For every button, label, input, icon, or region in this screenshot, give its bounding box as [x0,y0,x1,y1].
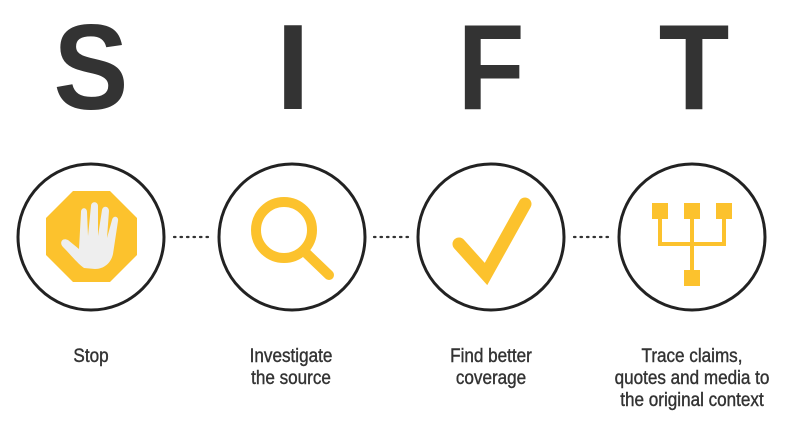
icon: magnifier [256,202,329,275]
label: trace: quotes and media to [615,367,769,388]
icon: tree [652,203,732,286]
label: trace: Trace claims, [642,345,742,366]
label: stop: Stop [73,345,109,366]
title: SIFT: S [54,0,128,135]
icon: check mark [459,204,525,274]
title: SIFT: F [457,0,525,135]
title: SIFT: T [659,0,729,136]
panel: investigate [219,164,365,310]
label: trace: the original context [620,389,764,410]
panel: trace [619,164,765,310]
title: SIFT: I [276,0,310,135]
label: find: coverage [456,367,526,388]
title: SIFT [54,0,729,136]
label: investigate: Investigate [250,345,332,366]
icon: stop hand [46,191,137,282]
label: find: Find better [450,345,532,366]
panel: stop [18,164,164,310]
connector dots [174,236,611,238]
panel: find [418,164,564,310]
labels [73,345,769,410]
label: investigate: the source [251,367,331,388]
